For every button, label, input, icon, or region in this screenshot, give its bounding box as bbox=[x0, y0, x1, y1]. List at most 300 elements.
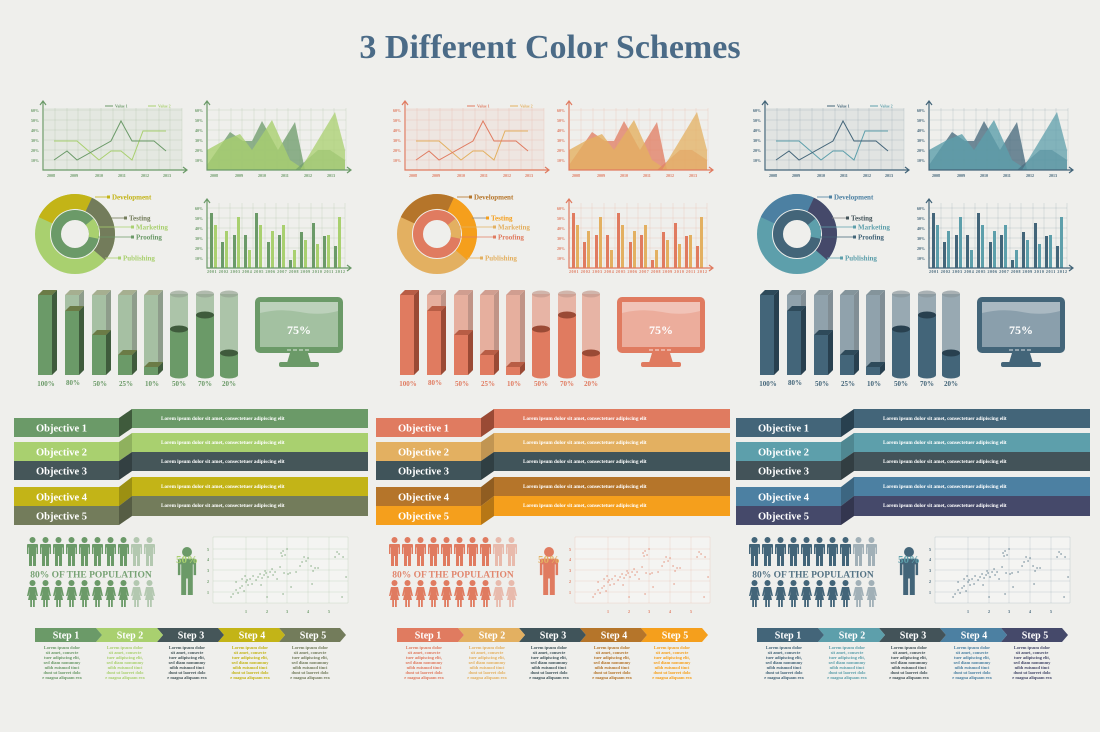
steps arrow: sed diam nonummy bbox=[766, 660, 803, 665]
donut chart: Testing bbox=[129, 214, 151, 222]
steps arrow: nibh euismod tinci bbox=[595, 665, 630, 670]
objectives list: Lorem ipsum dolor sit amet, consectetuer adipiscing elit bbox=[523, 503, 647, 509]
bar chart: 20% bbox=[557, 246, 565, 251]
steps arrow bbox=[757, 628, 1068, 680]
3D bar chart bbox=[399, 290, 600, 388]
scatter plot: 5 bbox=[569, 547, 571, 552]
area chart: 2009 bbox=[957, 173, 965, 178]
steps arrow: tuer adipiscing elit, bbox=[107, 655, 143, 660]
steps arrow: Lorem ipsum dolor bbox=[232, 645, 268, 650]
line chart: 2009 bbox=[70, 173, 78, 178]
single person 50% bbox=[176, 547, 198, 595]
objectives list: Objective 2 bbox=[398, 448, 449, 458]
steps arrow: Lorem ipsum dolor bbox=[292, 645, 328, 650]
objectives list: Objective 4 bbox=[36, 492, 88, 504]
3D bar chart: 50% bbox=[93, 380, 107, 388]
bar chart bbox=[195, 199, 351, 274]
scatter plot: 5 bbox=[1050, 609, 1052, 614]
line chart: 2008 bbox=[769, 173, 777, 178]
donut chart bbox=[32, 191, 168, 277]
area chart bbox=[195, 101, 351, 178]
steps arrow: tuer adipiscing elit, bbox=[654, 655, 690, 660]
scatter plot bbox=[207, 537, 348, 614]
3D bar chart: 10% bbox=[507, 380, 521, 388]
steps arrow: sit amet, consecte bbox=[46, 650, 78, 655]
scatter plot: 4 bbox=[207, 557, 209, 562]
steps arrow: Lorem ipsum dolor bbox=[1014, 645, 1050, 650]
people pictogram 80%: 80% OF THE POPULATION bbox=[752, 570, 874, 580]
steps arrow: sed diam nonummy bbox=[891, 660, 928, 665]
line chart: Value 1 bbox=[837, 104, 850, 108]
icon: monitor 75%: 75% bbox=[287, 323, 311, 337]
steps arrow: Step 1 bbox=[53, 630, 79, 642]
steps arrow: dunt ut laoreet dolo bbox=[232, 670, 269, 675]
area chart: 40% bbox=[195, 128, 203, 133]
steps arrow: Step 4 bbox=[239, 630, 265, 642]
single person 50% bbox=[538, 547, 560, 595]
bar chart: 60% bbox=[557, 206, 565, 211]
line chart: 40% bbox=[31, 128, 39, 133]
area chart: 50% bbox=[557, 118, 565, 123]
objectives list: Lorem ipsum dolor sit amet, consectetuer adipiscing elit bbox=[161, 440, 285, 446]
scatter plot bbox=[569, 537, 710, 614]
steps arrow: Lorem ipsum dolor bbox=[406, 645, 442, 650]
objectives list: Lorem ipsum dolor sit amet, consectetuer adipiscing elit bbox=[523, 459, 647, 465]
scatter plot: 5 bbox=[328, 609, 330, 614]
donut chart: Proofing bbox=[858, 234, 884, 242]
bar chart: 40% bbox=[557, 226, 565, 231]
objectives list: Objective 5 bbox=[36, 512, 87, 522]
bar chart: 60% bbox=[195, 206, 203, 211]
3D bar chart: 10% bbox=[145, 380, 159, 388]
steps arrow: nibh euismod tinci bbox=[45, 665, 80, 670]
area chart: 2012 bbox=[1026, 173, 1034, 178]
donut chart: Testing bbox=[491, 214, 513, 222]
line chart: Value 1 bbox=[477, 104, 490, 108]
objectives list: Objective 2 bbox=[758, 448, 809, 458]
3D bar chart: 70% bbox=[560, 380, 574, 388]
scatter plot: 3 bbox=[1008, 609, 1010, 614]
steps arrow: Step 1 bbox=[775, 630, 801, 642]
steps arrow: e magna aliquam era bbox=[467, 675, 507, 680]
area chart: 2010 bbox=[620, 173, 628, 178]
objectives list bbox=[376, 409, 730, 525]
scatter plot: 3 bbox=[929, 568, 931, 573]
scatter plot: 1 bbox=[207, 590, 209, 595]
scatter plot: 2 bbox=[628, 609, 630, 614]
steps arrow: e magna aliquam era bbox=[290, 675, 330, 680]
scatter plot: 5 bbox=[929, 547, 931, 552]
area chart: 20% bbox=[557, 148, 565, 153]
single person 50%: 50% bbox=[898, 554, 920, 566]
steps arrow: sit amet, consecte bbox=[471, 650, 503, 655]
donut chart: Testing bbox=[851, 214, 873, 222]
area chart: 2008 bbox=[210, 173, 218, 178]
line chart: 40% bbox=[753, 128, 761, 133]
area chart: 60% bbox=[557, 108, 565, 113]
objectives list: Lorem ipsum dolor sit amet, consectetuer adipiscing elit bbox=[523, 484, 647, 490]
3D bar chart: 50% bbox=[172, 380, 186, 388]
line chart: 2009 bbox=[432, 173, 440, 178]
single person 50%: 50% bbox=[176, 554, 198, 566]
area chart: 30% bbox=[917, 138, 925, 143]
bar chart: 50% bbox=[195, 216, 203, 221]
steps arrow: sed diam nonummy bbox=[406, 660, 443, 665]
line chart: 30% bbox=[753, 138, 761, 143]
line chart: 10% bbox=[393, 158, 401, 163]
scatter plot: 4 bbox=[669, 609, 671, 614]
steps arrow: tuer adipiscing elit, bbox=[891, 655, 927, 660]
area chart: 2009 bbox=[235, 173, 243, 178]
objectives list: Lorem ipsum dolor sit amet, consectetuer adipiscing elit bbox=[161, 459, 285, 465]
steps arrow: sed diam nonummy bbox=[829, 660, 866, 665]
objectives list: Lorem ipsum dolor sit amet, consectetuer adipiscing elit bbox=[883, 484, 1007, 490]
line chart: 2012 bbox=[141, 173, 149, 178]
line chart: 30% bbox=[31, 138, 39, 143]
area chart: 50% bbox=[195, 118, 203, 123]
steps arrow: nibh euismod tinci bbox=[655, 665, 690, 670]
scatter plot: 1 bbox=[607, 609, 609, 614]
area chart: 2010 bbox=[980, 173, 988, 178]
line chart bbox=[31, 101, 187, 178]
area chart: 50% bbox=[917, 118, 925, 123]
bar chart bbox=[557, 199, 713, 274]
line chart: 30% bbox=[393, 138, 401, 143]
steps arrow: e magna aliquam era bbox=[42, 675, 82, 680]
steps arrow: nibh euismod tinci bbox=[233, 665, 268, 670]
steps arrow bbox=[397, 628, 708, 680]
steps arrow: e magna aliquam era bbox=[827, 675, 867, 680]
line chart: 40% bbox=[393, 128, 401, 133]
scatter plot: 3 bbox=[207, 568, 209, 573]
area chart: 2013 bbox=[1049, 173, 1057, 178]
panel: blue color scheme bbox=[736, 101, 1090, 680]
steps arrow: sit amet, consecte bbox=[596, 650, 628, 655]
line chart: 60% bbox=[753, 108, 761, 113]
donut chart: Development bbox=[474, 194, 514, 202]
line chart: 2013 bbox=[163, 173, 171, 178]
objectives list: Lorem ipsum dolor sit amet, consectetuer adipiscing elit bbox=[523, 416, 647, 422]
line chart: 2013 bbox=[885, 173, 893, 178]
line chart: 10% bbox=[753, 158, 761, 163]
area chart: 2013 bbox=[327, 173, 335, 178]
steps arrow: Step 5 bbox=[300, 630, 326, 642]
3D bar chart bbox=[759, 290, 960, 388]
steps arrow: Lorem ipsum dolor bbox=[766, 645, 802, 650]
scatter plot: 2 bbox=[266, 609, 268, 614]
steps arrow: tuer adipiscing elit, bbox=[232, 655, 268, 660]
objectives list: Objective 1 bbox=[36, 424, 87, 434]
donut chart: Publishing bbox=[123, 254, 155, 262]
objectives list: Lorem ipsum dolor sit amet, consectetuer adipiscing elit bbox=[883, 416, 1007, 422]
donut chart: Marketing bbox=[136, 224, 168, 232]
3D bar chart: 70% bbox=[198, 380, 212, 388]
steps arrow: dunt ut laoreet dolo bbox=[766, 670, 803, 675]
3D bar chart: 50% bbox=[455, 380, 469, 388]
bar chart: 40% bbox=[917, 226, 925, 231]
line chart: 2009 bbox=[792, 173, 800, 178]
line chart: 60% bbox=[393, 108, 401, 113]
steps arrow: sit amet, consecte bbox=[656, 650, 688, 655]
steps arrow: sed diam nonummy bbox=[531, 660, 568, 665]
objectives list: Objective 4 bbox=[758, 492, 810, 504]
scatter plot: 5 bbox=[690, 609, 692, 614]
steps arrow: nibh euismod tinci bbox=[955, 665, 990, 670]
steps arrow: e magna aliquam era bbox=[889, 675, 929, 680]
steps arrow: sed diam nonummy bbox=[954, 660, 991, 665]
objectives list bbox=[14, 409, 368, 525]
bar chart: 10% bbox=[195, 256, 203, 261]
steps arrow: sed diam nonummy bbox=[169, 660, 206, 665]
bar chart: 30% bbox=[557, 236, 565, 241]
line chart: 2011 bbox=[840, 173, 848, 178]
steps arrow: Step 4 bbox=[961, 630, 987, 642]
3D bar chart: 20% bbox=[584, 380, 598, 388]
scatter plot: 3 bbox=[286, 609, 288, 614]
steps arrow: e magna aliquam era bbox=[592, 675, 632, 680]
3D bar chart bbox=[37, 290, 238, 388]
line chart: Value 1 bbox=[115, 104, 128, 108]
steps arrow: tuer adipiscing elit, bbox=[1014, 655, 1050, 660]
line chart: Value 2 bbox=[880, 104, 893, 108]
objectives list: Lorem ipsum dolor sit amet, consectetuer adipiscing elit bbox=[523, 440, 647, 446]
donut chart: Marketing bbox=[858, 224, 890, 232]
donut chart: Development bbox=[834, 194, 874, 202]
steps arrow: dunt ut laoreet dolo bbox=[891, 670, 928, 675]
steps arrow: sed diam nonummy bbox=[292, 660, 329, 665]
scatter plot: 4 bbox=[929, 557, 931, 562]
line chart: 2010 bbox=[457, 173, 465, 178]
steps arrow: nibh euismod tinci bbox=[293, 665, 328, 670]
steps arrow: Step 4 bbox=[601, 630, 627, 642]
area chart: 2011 bbox=[1003, 173, 1011, 178]
area chart: 2013 bbox=[689, 173, 697, 178]
area chart: 30% bbox=[195, 138, 203, 143]
bar chart: 2001 2002 2003 2004 2005 2006 2007 2008 2009 2010 2011 2012 bbox=[207, 269, 345, 274]
steps arrow: sed diam nonummy bbox=[232, 660, 269, 665]
steps arrow: Lorem ipsum dolor bbox=[954, 645, 990, 650]
bar chart: 10% bbox=[917, 256, 925, 261]
line chart: 60% bbox=[31, 108, 39, 113]
line chart: 50% bbox=[393, 118, 401, 123]
objectives list bbox=[736, 409, 1090, 525]
scatter plot: 1 bbox=[569, 590, 571, 595]
steps arrow: Step 5 bbox=[1022, 630, 1048, 642]
line chart: 50% bbox=[753, 118, 761, 123]
steps arrow: dunt ut laoreet dolo bbox=[169, 670, 206, 675]
steps arrow: dunt ut laoreet dolo bbox=[594, 670, 631, 675]
steps arrow: Lorem ipsum dolor bbox=[107, 645, 143, 650]
steps arrow: Step 3 bbox=[540, 630, 566, 642]
panel: green color scheme bbox=[14, 101, 368, 680]
objectives list: Objective 1 bbox=[758, 424, 809, 434]
area chart: 60% bbox=[195, 108, 203, 113]
steps arrow: tuer adipiscing elit, bbox=[292, 655, 328, 660]
steps arrow: nibh euismod tinci bbox=[1015, 665, 1050, 670]
donut chart: Development bbox=[112, 194, 152, 202]
line chart bbox=[393, 101, 549, 178]
area chart: 20% bbox=[917, 148, 925, 153]
icon: monitor 75%: 75% bbox=[1009, 323, 1033, 337]
3D bar chart: 20% bbox=[944, 380, 958, 388]
steps arrow: nibh euismod tinci bbox=[892, 665, 927, 670]
area chart: 2009 bbox=[597, 173, 605, 178]
steps arrow: Step 3 bbox=[900, 630, 926, 642]
icon: monitor 75% bbox=[977, 297, 1065, 367]
objectives list: Objective 1 bbox=[398, 424, 449, 434]
steps arrow: dunt ut laoreet dolo bbox=[531, 670, 568, 675]
line chart: 2008 bbox=[409, 173, 417, 178]
steps arrow: Lorem ipsum dolor bbox=[654, 645, 690, 650]
objectives list: Lorem ipsum dolor sit amet, consectetuer adipiscing elit bbox=[883, 503, 1007, 509]
scatter plot: 5 bbox=[207, 547, 209, 552]
3D bar chart: 50% bbox=[894, 380, 908, 388]
steps arrow: Step 1 bbox=[415, 630, 441, 642]
steps arrow: nibh euismod tinci bbox=[532, 665, 567, 670]
objectives list: Objective 5 bbox=[398, 512, 449, 522]
icon: monitor 75% bbox=[617, 297, 705, 367]
scatter plot: 3 bbox=[648, 609, 650, 614]
3D bar chart: 70% bbox=[920, 380, 934, 388]
objectives list: Lorem ipsum dolor sit amet, consectetuer adipiscing elit bbox=[161, 484, 285, 490]
scatter plot: 4 bbox=[1029, 609, 1031, 614]
steps arrow: e magna aliquam era bbox=[230, 675, 270, 680]
steps arrow: sit amet, consecte bbox=[234, 650, 266, 655]
steps arrow: e magna aliquam era bbox=[952, 675, 992, 680]
steps arrow: nibh euismod tinci bbox=[830, 665, 865, 670]
steps arrow: sit amet, consecte bbox=[956, 650, 988, 655]
3D bar chart: 100% bbox=[37, 380, 55, 388]
steps arrow bbox=[35, 628, 346, 680]
line chart bbox=[753, 101, 909, 178]
steps arrow: sit amet, consecte bbox=[768, 650, 800, 655]
steps arrow: nibh euismod tinci bbox=[407, 665, 442, 670]
3D bar chart: 25% bbox=[481, 380, 495, 388]
single person 50%: 50% bbox=[538, 554, 560, 566]
steps arrow: tuer adipiscing elit, bbox=[766, 655, 802, 660]
area chart: 2010 bbox=[258, 173, 266, 178]
objectives list: Objective 5 bbox=[758, 512, 809, 522]
steps arrow: e magna aliquam era bbox=[1012, 675, 1052, 680]
bar chart bbox=[917, 199, 1073, 274]
people pictogram 80% bbox=[389, 537, 517, 607]
steps arrow: sed diam nonummy bbox=[594, 660, 631, 665]
steps arrow: Step 3 bbox=[178, 630, 204, 642]
steps arrow: Lorem ipsum dolor bbox=[169, 645, 205, 650]
scatter plot: 4 bbox=[307, 609, 309, 614]
line chart: 2012 bbox=[503, 173, 511, 178]
objectives list: Objective 3 bbox=[36, 466, 87, 478]
3D bar chart: 25% bbox=[841, 380, 855, 388]
line chart: 20% bbox=[31, 148, 39, 153]
steps arrow: dunt ut laoreet dolo bbox=[829, 670, 866, 675]
scatter plot: 2 bbox=[929, 579, 931, 584]
line chart: 2012 bbox=[863, 173, 871, 178]
area chart bbox=[917, 101, 1073, 178]
area chart: 30% bbox=[557, 138, 565, 143]
steps arrow: sed diam nonummy bbox=[107, 660, 144, 665]
line chart: 2010 bbox=[95, 173, 103, 178]
steps arrow: e magna aliquam era bbox=[652, 675, 692, 680]
objectives list: Lorem ipsum dolor sit amet, consectetuer adipiscing elit bbox=[883, 459, 1007, 465]
3D bar chart: 25% bbox=[119, 380, 133, 388]
steps arrow: nibh euismod tinci bbox=[170, 665, 205, 670]
steps arrow: dunt ut laoreet dolo bbox=[406, 670, 443, 675]
area chart: 10% bbox=[557, 158, 565, 163]
steps arrow: dunt ut laoreet dolo bbox=[292, 670, 329, 675]
objectives list: Objective 3 bbox=[758, 466, 809, 478]
3D bar chart: 80% bbox=[428, 379, 442, 387]
bar chart: 20% bbox=[195, 246, 203, 251]
steps arrow: Lorem ipsum dolor bbox=[594, 645, 630, 650]
title: 3 Different Color Schemes bbox=[359, 29, 741, 66]
steps arrow: sit amet, consecte bbox=[893, 650, 925, 655]
steps arrow: tuer adipiscing elit, bbox=[406, 655, 442, 660]
donut chart bbox=[394, 191, 530, 277]
3D bar chart: 20% bbox=[222, 380, 236, 388]
objectives list: Objective 3 bbox=[398, 466, 449, 478]
steps arrow: tuer adipiscing elit, bbox=[829, 655, 865, 660]
line chart: 20% bbox=[393, 148, 401, 153]
donut chart: Proofing bbox=[498, 234, 524, 242]
steps arrow: sit amet, consecte bbox=[831, 650, 863, 655]
line chart: 50% bbox=[31, 118, 39, 123]
steps arrow: tuer adipiscing elit, bbox=[469, 655, 505, 660]
scatter plot: 3 bbox=[569, 568, 571, 573]
steps arrow: dunt ut laoreet dolo bbox=[954, 670, 991, 675]
steps arrow: dunt ut laoreet dolo bbox=[107, 670, 144, 675]
steps arrow: sed diam nonummy bbox=[1014, 660, 1051, 665]
steps arrow: sed diam nonummy bbox=[654, 660, 691, 665]
people pictogram 80% bbox=[749, 537, 877, 607]
scatter plot: 1 bbox=[967, 609, 969, 614]
steps arrow: Lorem ipsum dolor bbox=[891, 645, 927, 650]
steps arrow: Step 2 bbox=[117, 630, 143, 642]
3D bar chart: 100% bbox=[399, 380, 417, 388]
people pictogram 80%: 80% OF THE POPULATION bbox=[392, 570, 514, 580]
people pictogram 80% bbox=[27, 537, 155, 607]
steps arrow: e magna aliquam era bbox=[404, 675, 444, 680]
area chart: 2012 bbox=[666, 173, 674, 178]
steps arrow: tuer adipiscing elit, bbox=[531, 655, 567, 660]
scatter plot: 2 bbox=[207, 579, 209, 584]
steps arrow: Lorem ipsum dolor bbox=[531, 645, 567, 650]
area chart: 10% bbox=[917, 158, 925, 163]
area chart: 20% bbox=[195, 148, 203, 153]
area chart: 2012 bbox=[304, 173, 312, 178]
steps arrow: tuer adipiscing elit, bbox=[169, 655, 205, 660]
3D bar chart: 80% bbox=[788, 379, 802, 387]
scatter plot: 2 bbox=[988, 609, 990, 614]
line chart: 10% bbox=[31, 158, 39, 163]
line chart: 2011 bbox=[480, 173, 488, 178]
line chart: 20% bbox=[753, 148, 761, 153]
donut chart bbox=[754, 191, 890, 277]
steps arrow: tuer adipiscing elit, bbox=[954, 655, 990, 660]
objectives list: Lorem ipsum dolor sit amet, consectetuer adipiscing elit bbox=[883, 440, 1007, 446]
scatter plot bbox=[929, 537, 1070, 614]
steps arrow: tuer adipiscing elit, bbox=[594, 655, 630, 660]
3D bar chart: 50% bbox=[534, 380, 548, 388]
steps arrow: e magna aliquam era bbox=[529, 675, 569, 680]
icon: monitor 75%: 75% bbox=[649, 323, 673, 337]
steps arrow: dunt ut laoreet dolo bbox=[654, 670, 691, 675]
steps arrow: sit amet, consecte bbox=[408, 650, 440, 655]
area chart bbox=[557, 101, 713, 178]
panel: orange color scheme bbox=[376, 101, 730, 680]
donut chart: Publishing bbox=[845, 254, 877, 262]
scatter plot: 1 bbox=[245, 609, 247, 614]
